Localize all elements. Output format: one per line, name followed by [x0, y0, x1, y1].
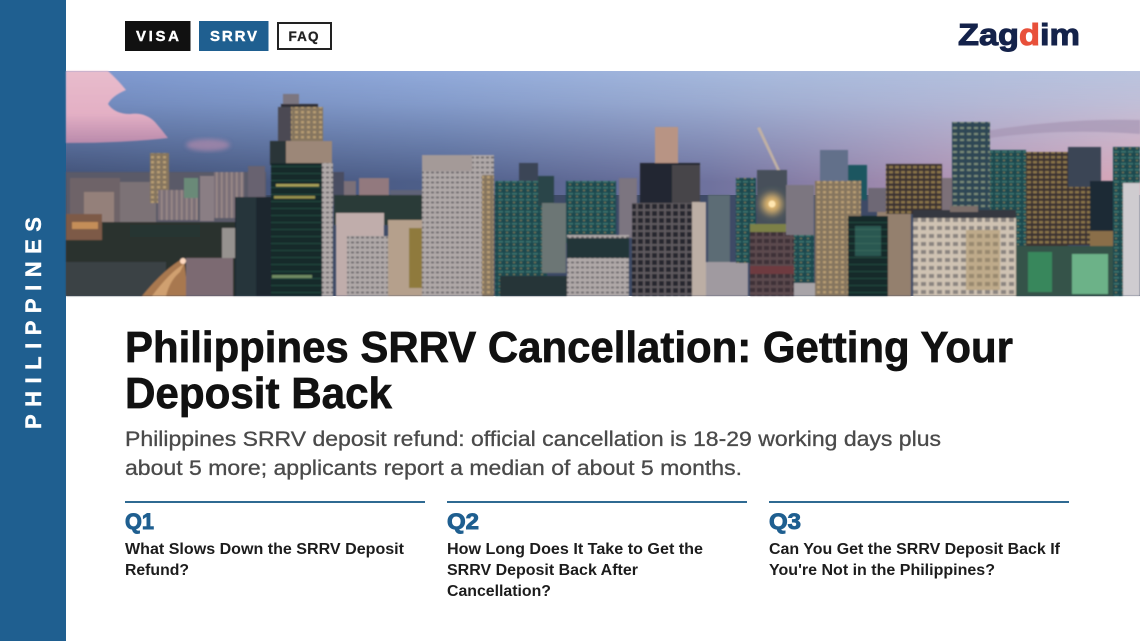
category tags: [125, 21, 331, 51]
question 2: [447, 501, 747, 600]
right side cluster: [820, 150, 848, 184]
right-of-center towers: [708, 195, 730, 267]
ground and trees: [66, 222, 241, 296]
tag: FAQ: [278, 23, 331, 49]
question 1: Q1: [125, 509, 154, 534]
title: Philippines SRRV Cancellation: Getting Your: [125, 323, 1013, 372]
question 3: You're Not in the Philippines?: [769, 562, 995, 579]
title: Deposit Back: [125, 369, 393, 418]
distant city: [66, 172, 266, 227]
subtitle: about 5 more; applicants report a median of about 5 months.: [125, 456, 742, 480]
question 2: Cancellation?: [447, 583, 551, 600]
subtitle: Philippines SRRV deposit refund: official cancellation is 18-29 working days plus: [125, 427, 941, 451]
question 1: [125, 501, 425, 579]
tag: VISA: VISA: [136, 28, 179, 45]
tag: VISA: [125, 21, 190, 51]
question 3: Can You Get the SRRV Deposit Back If: [769, 541, 1061, 558]
question 3: [769, 501, 1069, 579]
sidebar: Philippines: PHILIPPINES: [21, 217, 46, 429]
question 1: Refund?: [125, 562, 189, 579]
tag: SRRV: [199, 21, 268, 51]
mid-left blocks: [336, 213, 384, 296]
pink cloud: [66, 71, 168, 143]
tag: FAQ: FAQ: [288, 29, 318, 44]
question 2: Q2: [447, 509, 479, 534]
dark grid tower: [655, 127, 678, 163]
logo: Zagdim: Zagdim: [958, 17, 1080, 52]
question 2: How Long Does It Take to Get the: [447, 541, 703, 558]
question 2: SRRV Deposit Back After: [447, 562, 638, 579]
subtitle: [125, 427, 941, 480]
tag: SRRV: SRRV: [210, 28, 257, 45]
sidebar: Philippines: [0, 0, 66, 641]
question 1: What Slows Down the SRRV Deposit: [125, 541, 404, 558]
main tower left: [235, 197, 273, 296]
question 3: Q3: [769, 509, 801, 534]
title: [125, 323, 1013, 418]
skyline photo: [66, 71, 1140, 296]
large tower center-left: [422, 155, 494, 296]
